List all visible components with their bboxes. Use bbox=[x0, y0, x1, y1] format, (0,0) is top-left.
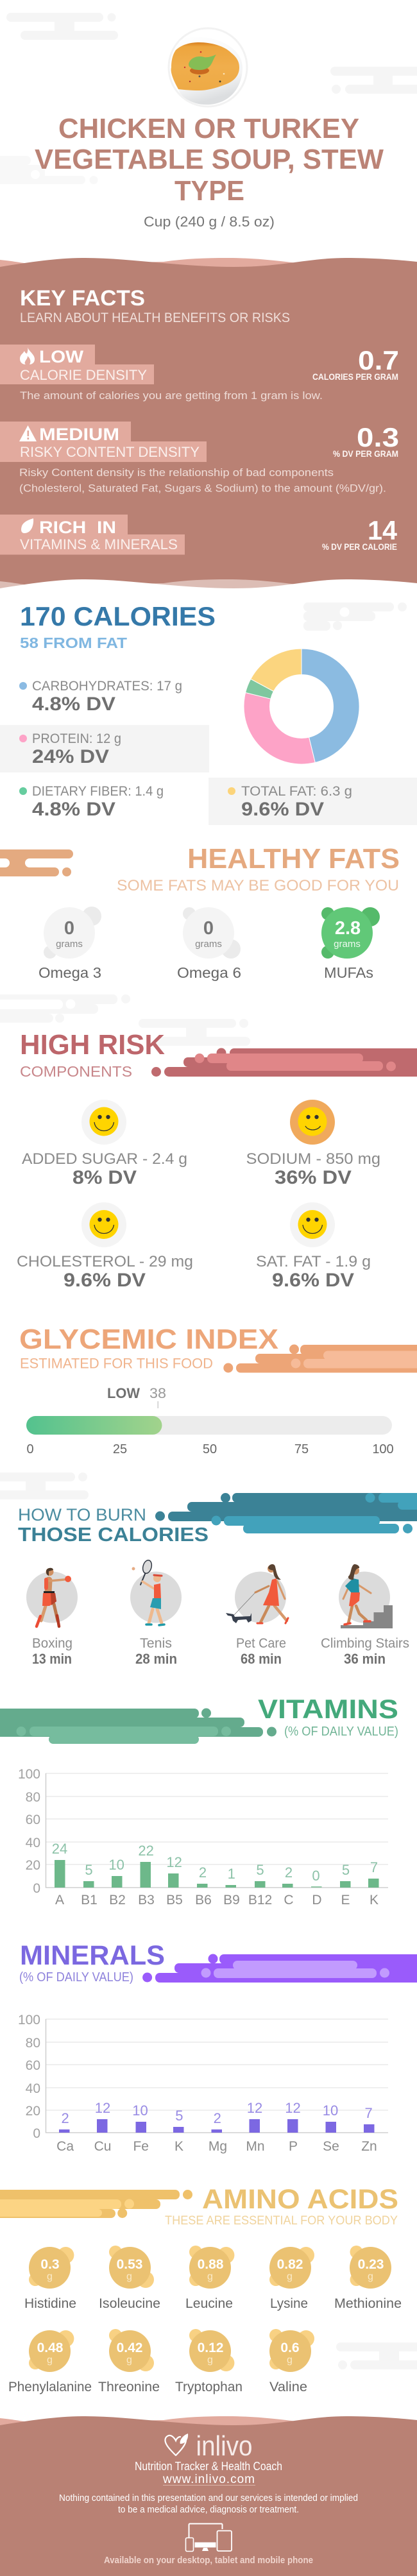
donut chart: calorie sources bbox=[244, 649, 359, 764]
risk item: cholesterol: CHOLESTEROL - 29 mg bbox=[17, 1253, 193, 1270]
fact: medium risky content density bbox=[0, 422, 399, 494]
disclaimer: to be a medical advice, diagnosis or treatment. bbox=[118, 2504, 299, 2515]
subheading: ESTIMATED FOR THIS FOOD bbox=[20, 1355, 213, 1372]
amino: phenylalanine: 0.48 bbox=[37, 2341, 64, 2355]
heading: calories: 170 CALORIES bbox=[20, 601, 216, 631]
stat: mufas: MUFAs bbox=[324, 964, 373, 981]
heading: minerals: MINERALS bbox=[20, 1940, 165, 1971]
risk item: cholesterol bbox=[17, 1202, 193, 1291]
logo: inlivo: inlivo bbox=[196, 2430, 253, 2462]
activity: pet care: 68 min bbox=[241, 1651, 282, 1667]
banner shape: amino acids bbox=[0, 2190, 192, 2218]
macro: dietary fiber: 4.8% DV bbox=[32, 799, 115, 820]
subheading: SOME FATS MAY BE GOOD FOR YOU bbox=[117, 877, 399, 894]
value: 14: 14 bbox=[368, 515, 398, 545]
amino: tryptophan bbox=[175, 2329, 243, 2394]
title: VEGETABLE SOUP, STEW bbox=[35, 144, 384, 175]
bar chart: vitamins: B2 bbox=[109, 1893, 126, 1907]
heading: key facts: KEY FACTS bbox=[20, 286, 145, 311]
bar chart: vitamins bbox=[18, 1767, 388, 1907]
background cloud: lower right bbox=[336, 2342, 417, 2369]
heading: glycemic index: GLYCEMIC INDEX bbox=[19, 1324, 278, 1355]
label: vitamins and minerals: VITAMINS & MINERALS bbox=[20, 536, 178, 552]
macro: carbohydrates: 4.8% DV bbox=[32, 694, 115, 715]
bar chart: minerals: 12 bbox=[247, 2100, 262, 2116]
bar chart: minerals: 80 bbox=[26, 2036, 40, 2051]
serving size: Cup (240 g / 8.5 oz) bbox=[144, 214, 275, 230]
activity: pet care bbox=[226, 1564, 288, 1667]
glycemic gauge: 25 bbox=[113, 1442, 127, 1456]
fact: low calorie density bbox=[0, 345, 399, 402]
background cloud: above high risk right bbox=[139, 1019, 250, 1046]
activity: climbing stairs bbox=[321, 1564, 409, 1667]
amino: lysine: Lysine bbox=[270, 2296, 308, 2311]
amino: threonine: g bbox=[126, 2355, 132, 2366]
bar chart: minerals: 2 bbox=[214, 2110, 221, 2126]
website link: www.inlivo.com bbox=[162, 2473, 255, 2486]
activity: boxing: Boxing bbox=[32, 1636, 72, 1651]
label: rich in: RICH IN bbox=[39, 518, 116, 537]
banner shape: healthy fats bbox=[0, 849, 73, 876]
icon: tennis player bbox=[132, 1559, 164, 1625]
risk item: cholesterol: 9.6% DV bbox=[64, 1270, 146, 1291]
risk item: added sugar bbox=[22, 1100, 187, 1188]
risk item: sodium: 36% DV bbox=[275, 1167, 352, 1188]
disclaimer: Nothing contained in this presentation and our services is intended or implied bbox=[59, 2493, 358, 2503]
activity: tennis: Tenis bbox=[140, 1636, 172, 1651]
amino: isoleucine bbox=[99, 2246, 160, 2311]
bar chart: vitamins: B9 bbox=[223, 1893, 240, 1907]
glycemic gauge: 0 bbox=[26, 1442, 34, 1456]
activity: boxing: 13 min bbox=[32, 1651, 72, 1667]
amino: lysine: 0.82 bbox=[277, 2257, 303, 2272]
subheading: LEARN ABOUT HEALTH BENEFITS OR RISKS bbox=[20, 311, 290, 325]
risk item: saturated fat bbox=[256, 1202, 371, 1291]
amino: isoleucine: Isoleucine bbox=[99, 2296, 160, 2311]
logo: inlivo bbox=[165, 2430, 253, 2462]
bar chart: minerals: 2 bbox=[61, 2110, 69, 2126]
stat: omega 3: Omega 3 bbox=[38, 964, 101, 981]
unit: calories per gram: CALORIES PER GRAM bbox=[312, 371, 398, 382]
banner shape: vitamins bbox=[0, 1708, 277, 1744]
glycemic gauge: 75 bbox=[294, 1442, 309, 1456]
macro: dietary fiber: DIETARY FIBER: 1.4 g bbox=[32, 784, 164, 799]
bar chart: minerals: Zn bbox=[361, 2139, 377, 2154]
amino: threonine: 0.42 bbox=[117, 2341, 142, 2355]
amino: isoleucine: g bbox=[126, 2271, 132, 2282]
amino: methionine: 0.23 bbox=[358, 2257, 384, 2272]
bar chart: vitamins: 20 bbox=[26, 1858, 40, 1873]
background cloud: above burn bbox=[0, 1472, 89, 1499]
value: 0.3: 0.3 bbox=[357, 422, 399, 452]
background cloud: top left bbox=[6, 13, 118, 40]
background cloud: top right bbox=[330, 67, 417, 94]
amino: histidine: Histidine bbox=[24, 2296, 76, 2311]
stat: omega 6 bbox=[177, 907, 241, 981]
stat: omega 6: grams bbox=[195, 939, 222, 950]
bar chart: minerals: 100 bbox=[18, 2013, 40, 2027]
bar chart: vitamins: 60 bbox=[26, 1813, 40, 1827]
bar chart: minerals: 12 bbox=[285, 2100, 301, 2116]
bar chart: vitamins: 2 bbox=[285, 1864, 293, 1881]
activity: tennis bbox=[130, 1559, 182, 1667]
amino: threonine: Threonine bbox=[98, 2380, 160, 2394]
activity: pet care: Pet Care bbox=[236, 1636, 286, 1651]
unit: % dv per gram: % DV PER GRAM bbox=[333, 448, 398, 459]
macro: total fat bbox=[208, 778, 417, 825]
activity: climbing stairs: Climbing Stairs bbox=[321, 1636, 409, 1651]
icon: warning triangle bbox=[19, 425, 37, 441]
label: calorie density: CALORIE DENSITY bbox=[20, 367, 147, 383]
amino: phenylalanine bbox=[8, 2330, 92, 2394]
macro: dietary fiber bbox=[19, 784, 164, 820]
label: low: LOW bbox=[39, 347, 84, 366]
amino: isoleucine: 0.53 bbox=[117, 2257, 142, 2272]
stat: omega 3 bbox=[38, 907, 101, 981]
amino: histidine: g bbox=[47, 2271, 53, 2282]
amino: valine bbox=[269, 2329, 314, 2394]
amino: leucine: 0.88 bbox=[198, 2257, 224, 2272]
bar chart: vitamins: 5 bbox=[256, 1862, 264, 1878]
heading: high risk: HIGH RISK bbox=[20, 1029, 165, 1061]
bar chart: vitamins: 40 bbox=[26, 1836, 40, 1850]
macro: protein bbox=[0, 725, 209, 772]
description bbox=[19, 466, 386, 494]
amino: lysine: g bbox=[287, 2271, 293, 2282]
bar chart: vitamins: 1 bbox=[228, 1866, 235, 1882]
risk item: added sugar: 8% DV bbox=[72, 1167, 137, 1188]
subheading: components: COMPONENTS bbox=[20, 1063, 132, 1080]
value: 0.7: 0.7 bbox=[358, 345, 399, 375]
bar chart: vitamins: E bbox=[341, 1893, 350, 1907]
bar chart: vitamins: 10 bbox=[108, 1857, 124, 1873]
bar chart: vitamins: B3 bbox=[138, 1893, 155, 1907]
glycemic gauge: LOW bbox=[107, 1385, 140, 1401]
bar chart: vitamins: 0 bbox=[312, 1868, 320, 1884]
bar chart: minerals: 0 bbox=[33, 2126, 40, 2141]
bar chart: vitamins: B1 bbox=[81, 1893, 98, 1907]
panel: key facts bbox=[0, 258, 417, 597]
stat: omega 6: 0 bbox=[203, 918, 214, 939]
icon: woman walking dog bbox=[226, 1564, 288, 1623]
bar chart: minerals: K bbox=[174, 2139, 183, 2154]
glycemic gauge: 50 bbox=[203, 1442, 217, 1456]
amino: leucine: g bbox=[207, 2271, 213, 2282]
bar chart: vitamins: B6 bbox=[195, 1893, 212, 1907]
macro: total fat: 9.6% DV bbox=[241, 799, 324, 820]
heading: vitamins: VITAMINS bbox=[258, 1694, 398, 1724]
bar chart: vitamins: 22 bbox=[138, 1843, 154, 1859]
amino: tryptophan: 0.12 bbox=[198, 2341, 223, 2355]
risk item: saturated fat: SAT. FAT - 1.9 g bbox=[256, 1253, 371, 1270]
tagline: Nutrition Tracker & Health Coach bbox=[135, 2460, 282, 2473]
subheading: minerals: (% OF DAILY VALUE) bbox=[19, 1970, 133, 1984]
icon: boxer bbox=[37, 1568, 71, 1626]
stat: omega 3: grams bbox=[56, 939, 83, 950]
macro: carbohydrates: CARBOHYDRATES: 17 g bbox=[32, 679, 182, 694]
heading: healthy fats: HEALTHY FATS bbox=[187, 843, 400, 874]
risk item: sodium: SODIUM - 850 mg bbox=[246, 1150, 380, 1168]
bar chart: vitamins: B5 bbox=[166, 1893, 183, 1907]
risk item: added sugar: ADDED SUGAR - 2.4 g bbox=[22, 1150, 187, 1168]
bar chart: minerals: 40 bbox=[26, 2081, 40, 2096]
food photo: soup bowl bbox=[169, 28, 247, 107]
bar chart: minerals: 12 bbox=[95, 2100, 110, 2116]
bar chart: vitamins: 100 bbox=[18, 1767, 40, 1782]
bar chart: minerals: Cu bbox=[94, 2139, 111, 2154]
bar chart: vitamins: 12 bbox=[166, 1854, 182, 1870]
amino: lysine bbox=[269, 2247, 314, 2311]
amino: tryptophan: g bbox=[207, 2355, 213, 2366]
glycemic gauge bbox=[26, 1385, 394, 1456]
stat: omega 3: 0 bbox=[64, 918, 74, 939]
bar chart: minerals: Ca bbox=[56, 2139, 74, 2154]
banner shape: minerals bbox=[142, 1954, 417, 1983]
risk item: sodium bbox=[246, 1100, 380, 1188]
bar chart: vitamins: K bbox=[370, 1893, 379, 1907]
bar chart: minerals: 60 bbox=[26, 2058, 40, 2073]
bar chart: minerals: 10 bbox=[323, 2103, 338, 2119]
amino: threonine bbox=[98, 2329, 160, 2394]
bar chart: minerals: 7 bbox=[364, 2105, 373, 2121]
risk item: saturated fat: 9.6% DV bbox=[272, 1270, 354, 1291]
icon: devices bbox=[186, 2524, 232, 2551]
description: Risky Content density is the relationship of bad components bbox=[19, 466, 334, 479]
bar chart: minerals: 5 bbox=[175, 2108, 183, 2124]
unit: % dv per calorie: % DV PER CALORIE bbox=[322, 542, 397, 552]
bar chart: minerals: 10 bbox=[132, 2103, 148, 2119]
amino: histidine bbox=[24, 2247, 76, 2311]
bar chart: vitamins: A bbox=[55, 1893, 64, 1907]
glycemic gauge: 38 bbox=[149, 1385, 166, 1401]
subheading: vitamins: (% OF DAILY VALUE) bbox=[284, 1725, 398, 1739]
fact: rich in vitamins and minerals bbox=[0, 515, 398, 554]
stat: mufas bbox=[321, 907, 380, 981]
icon: flame bbox=[20, 347, 35, 364]
bar chart: minerals: Se bbox=[323, 2139, 339, 2154]
amino: tryptophan: Tryptophan bbox=[175, 2380, 243, 2394]
background cloud: left of title bbox=[0, 156, 98, 184]
amino: phenylalanine: Phenylalanine bbox=[8, 2380, 92, 2394]
bar chart: vitamins: 2 bbox=[199, 1864, 207, 1881]
bar chart: minerals: Mg bbox=[208, 2139, 227, 2154]
bar chart: minerals: Fe bbox=[133, 2139, 149, 2154]
bar chart: minerals: P bbox=[289, 2139, 298, 2154]
amino: valine: g bbox=[287, 2355, 293, 2366]
amino: leucine bbox=[185, 2246, 234, 2311]
amino: histidine: 0.3 bbox=[40, 2257, 60, 2272]
heading: how to burn: HOW TO BURN bbox=[18, 1505, 146, 1524]
subheading: from fat: 58 FROM FAT bbox=[20, 635, 127, 651]
stat: mufas: grams bbox=[334, 939, 361, 950]
amino: leucine: Leucine bbox=[185, 2296, 233, 2311]
macro: protein: PROTEIN: 12 g bbox=[32, 731, 121, 746]
macro: carbohydrates bbox=[19, 679, 182, 715]
background cloud: calories bbox=[303, 602, 407, 631]
banner shape: glycemic index bbox=[223, 1345, 417, 1373]
macro: protein: 24% DV bbox=[32, 746, 109, 767]
label: risky content density: RISKY CONTENT DENSITY bbox=[20, 444, 200, 460]
banner shape: burn calories bbox=[155, 1493, 417, 1533]
stat: mufas: 2.8 bbox=[335, 918, 361, 939]
macro: total fat: TOTAL FAT: 6.3 g bbox=[241, 784, 352, 799]
heading: amino acids: AMINO ACIDS bbox=[202, 2184, 398, 2215]
icon: woman climbing stairs bbox=[341, 1564, 393, 1628]
description: (Cholesterol, Saturated Fat, Sugars & Sodium) to the amount (%DV/gr). bbox=[19, 482, 386, 494]
bar chart: vitamins: C bbox=[284, 1893, 294, 1907]
amino: valine: Valine bbox=[269, 2380, 307, 2394]
title: CHICKEN OR TURKEY bbox=[58, 113, 359, 144]
amino: methionine: Methionine bbox=[334, 2296, 402, 2311]
subheading: amino acids: THESE ARE ESSENTIAL FOR YOUR BODY bbox=[165, 2214, 398, 2228]
bar chart: vitamins: 5 bbox=[342, 1862, 350, 1878]
banner shape: high risk bbox=[151, 1048, 417, 1077]
bar chart: minerals: Mn bbox=[246, 2139, 265, 2154]
bar chart: vitamins: 24 bbox=[52, 1841, 67, 1857]
bar chart: vitamins: 7 bbox=[370, 1859, 378, 1875]
description: The amount of calories you are getting from 1 gram is low. bbox=[20, 389, 323, 402]
amino: methionine: g bbox=[368, 2271, 373, 2282]
activity: climbing stairs: 36 min bbox=[344, 1651, 386, 1667]
bar chart: vitamins: 80 bbox=[26, 1790, 40, 1805]
bar chart: minerals bbox=[18, 2013, 388, 2154]
bar chart: vitamins: 0 bbox=[33, 1881, 40, 1896]
icon: leaf bbox=[21, 518, 33, 533]
amino: phenylalanine: g bbox=[47, 2355, 53, 2366]
availability note: Available on your desktop, tablet and mobile phone bbox=[104, 2555, 313, 2566]
bar chart: vitamins: D bbox=[312, 1893, 322, 1907]
title bbox=[35, 113, 384, 207]
stat: omega 6: Omega 6 bbox=[177, 964, 241, 981]
panel: footer bbox=[0, 2416, 417, 2576]
label: medium: MEDIUM bbox=[39, 425, 119, 444]
bar chart: minerals: 20 bbox=[26, 2104, 40, 2119]
background cloud: above high risk left bbox=[0, 994, 130, 1023]
bar chart: vitamins: 5 bbox=[85, 1862, 93, 1878]
disclaimer bbox=[59, 2493, 358, 2515]
glycemic gauge: 100 bbox=[372, 1442, 394, 1456]
amino: methionine bbox=[334, 2246, 402, 2311]
title: TYPE bbox=[174, 175, 244, 207]
activity: boxing bbox=[26, 1568, 78, 1667]
heading: those calories: THOSE CALORIES bbox=[18, 1523, 208, 1546]
amino: valine: 0.6 bbox=[280, 2341, 300, 2355]
activity: tennis: 28 min bbox=[135, 1651, 177, 1667]
bar chart: vitamins: B12 bbox=[248, 1893, 272, 1907]
